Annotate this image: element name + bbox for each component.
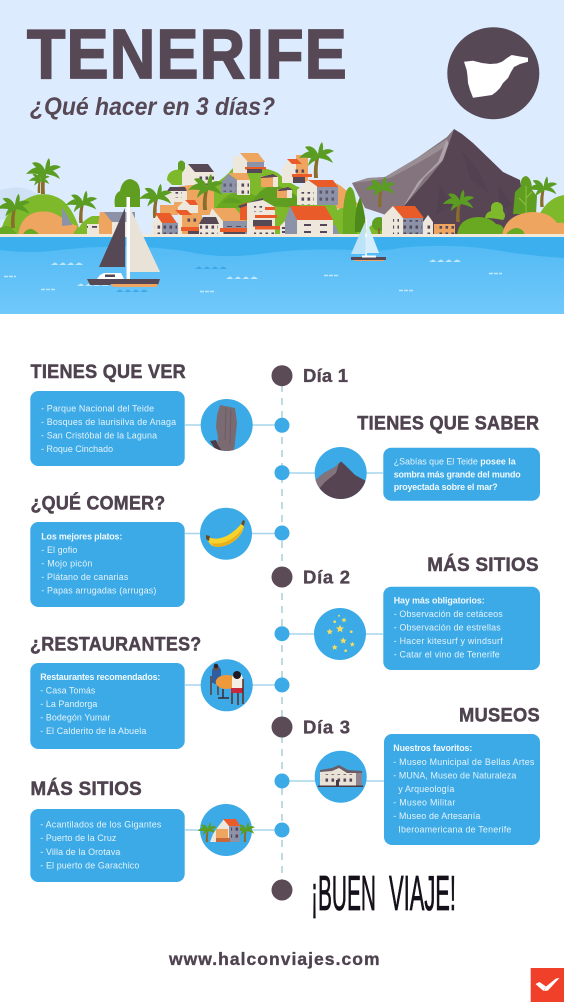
icon: volcano: [312, 447, 368, 500]
icon: brand logo: [531, 968, 564, 1002]
illustration: volcano Teide: [352, 129, 526, 236]
list: - Bosques de laurisilva de Anaga: [41, 417, 176, 427]
illustration: front row houses: [152, 198, 346, 238]
icon: restaurant table: [201, 659, 253, 711]
website url: www.halconviajes.com: [168, 949, 380, 969]
sky background: [0, 0, 564, 238]
list: - Papas arrugadas (arrugas): [41, 586, 156, 596]
illustration: large sailboat: [87, 179, 160, 287]
list: Los mejores platos:: [41, 532, 122, 542]
heading: ¿QUÉ COMER?: [30, 491, 166, 514]
list: - El puerto de Garachico: [40, 860, 139, 870]
panel: tienes que saber: [312, 412, 540, 501]
list: - Catar el vino de Tenerife: [394, 650, 500, 660]
panel: mas sitios derecha: [314, 553, 540, 670]
list: Restaurantes recomendados:: [40, 672, 160, 682]
list: [394, 596, 503, 660]
panel: que comer: [30, 491, 252, 607]
panel: tienes que ver: [30, 361, 253, 466]
label: day 2: Día 2: [303, 566, 350, 587]
list: - Bodegón Yumar: [40, 712, 110, 722]
illustration: shoreline: [0, 234, 564, 238]
timeline spine: [281, 385, 283, 882]
list: Iberoamericana de Tenerife: [398, 824, 511, 834]
illustration: hillside upper houses: [167, 142, 334, 202]
icon: museum building: [315, 751, 367, 803]
illustration: central large house: [297, 180, 338, 205]
illustration: trees by volcano: [333, 187, 386, 237]
closing message: ¡BUEN: [311, 867, 376, 921]
panel: hero header: [0, 0, 564, 314]
info box: [30, 522, 185, 607]
panel: restaurantes: [30, 634, 253, 749]
list: Hay más obligatorios:: [394, 596, 485, 606]
info box: [30, 809, 185, 882]
list: Nuestros favoritos:: [393, 743, 472, 753]
list: - Museo Militar: [393, 798, 455, 808]
infographic canvas: VIAJE!: [389, 867, 456, 921]
list: - San Cristóbal de la Laguna: [41, 430, 157, 440]
fact text: ¿Sabías que El Teide posee la: [394, 456, 516, 466]
icon: banana: [200, 508, 252, 560]
list: - Hacer kitesurf y windsurf: [394, 636, 503, 646]
illustration: right village houses: [382, 206, 455, 238]
subtitle: ¿Qué hacer en 3 días?: [30, 93, 275, 121]
list: - Observación de estrellas: [394, 622, 501, 632]
connector lines: [185, 425, 384, 830]
list: - Parque Nacional del Teide: [41, 404, 154, 414]
list: - Casa Tomás: [40, 686, 96, 696]
list: [41, 404, 176, 454]
illustration: houses left of boat: [87, 212, 135, 238]
info box: [383, 448, 540, 501]
info box: [30, 663, 185, 749]
list: - Puerto de la Cruz: [40, 833, 116, 843]
heading: ¿RESTAURANTES?: [30, 634, 202, 656]
info box: [383, 587, 540, 670]
icon: island map badge: [447, 27, 539, 119]
heading: MÁS SITIOS: [427, 553, 539, 576]
list: - Roque Cinchado: [41, 444, 113, 454]
fact text: proyectada sobre el mar?: [394, 482, 498, 492]
label: day 3: Día 3: [303, 716, 350, 737]
list: - MUNA, Museo de Naturaleza: [393, 770, 516, 780]
list: [393, 743, 535, 834]
list: - La Pandorga: [40, 699, 97, 709]
timeline day markers: [272, 365, 292, 900]
list: - Villa de la Orotava: [40, 847, 120, 857]
illustration: small sailboat: [351, 219, 386, 261]
illustration: sea: [0, 237, 564, 314]
heading: TIENES QUE SABER: [357, 412, 539, 434]
list: - El gofio: [41, 545, 77, 555]
heading: TIENES QUE VER: [30, 361, 186, 383]
list: [40, 820, 162, 870]
icon: roque cinchado: [201, 399, 253, 452]
heading: MUSEOS: [459, 704, 540, 726]
info box: [30, 391, 185, 466]
list: y Arqueología: [398, 784, 454, 794]
icon: village houses: [198, 804, 255, 856]
list: [41, 532, 156, 596]
illustration: left hills and palms: [0, 158, 106, 238]
illustration: village hill background: [167, 160, 358, 240]
timeline blue dots: [274, 418, 290, 838]
list: - Mojo picón: [41, 558, 92, 568]
list: - Acantilados de los Gigantes: [40, 820, 162, 830]
title: TENERIFE: [27, 15, 348, 93]
illustration: right hills and trees: [366, 176, 564, 236]
list: - Museo Municipal de Bellas Artes: [393, 757, 535, 767]
fact text: [394, 456, 521, 492]
distant haze hill: [0, 188, 60, 220]
illustration: palms in village: [139, 174, 223, 218]
info box: [384, 734, 540, 845]
list: - El Calderito de la Abuela: [40, 726, 146, 736]
label: day 1: Día 1: [303, 365, 348, 386]
icon: stars: [314, 608, 366, 660]
list: - Observación de cetáceos: [394, 609, 503, 619]
panel: museos: [315, 704, 540, 845]
list: - Plátano de canarias: [41, 572, 129, 582]
panel: mas sitios izquierda: [30, 777, 255, 882]
heading: MÁS SITIOS: [30, 777, 142, 800]
list: [40, 672, 160, 736]
list: - Museo de Artesanía: [393, 811, 480, 821]
fact text: sombra más grande del mundo: [394, 469, 521, 479]
